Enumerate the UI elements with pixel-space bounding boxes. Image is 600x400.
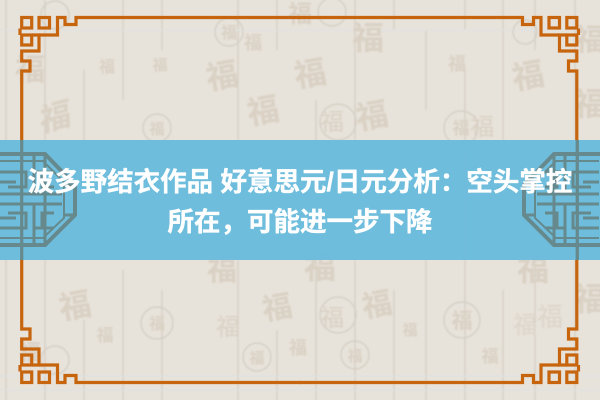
background: paper with faint 福 pattern: 福 xyxy=(448,54,466,74)
background: paper with faint 福 pattern: 福 xyxy=(149,315,165,333)
background: paper with faint 福 pattern: 福 xyxy=(99,58,115,76)
background: paper with faint 福 pattern: 福 xyxy=(207,254,237,287)
background: paper with faint 福 pattern: 福 xyxy=(249,350,265,367)
background: paper with faint 福 pattern: 福 xyxy=(513,312,537,339)
background: paper with faint 福 pattern: 福 xyxy=(221,24,237,42)
background: paper with faint 福 pattern: 福 xyxy=(304,249,336,285)
background: paper with faint 福 pattern: 福 xyxy=(359,287,395,324)
background: paper with faint 福 pattern: 福 xyxy=(452,310,472,333)
background: paper with faint 福 pattern: 福 xyxy=(353,95,391,136)
background: paper with faint 福 pattern: 福 xyxy=(452,119,470,138)
background: paper with faint 福 pattern: 福 xyxy=(320,305,344,332)
background: paper with faint 福 pattern: 福 xyxy=(56,285,94,326)
background: paper with faint 福 pattern: 福 xyxy=(15,54,45,87)
background: paper with faint 福 pattern: 福 xyxy=(216,314,240,341)
background: paper with faint 福 pattern: 福 xyxy=(244,90,282,131)
background: paper with faint 福 pattern: 福 xyxy=(320,109,344,136)
background: paper with faint 福 pattern: 福 xyxy=(482,347,498,366)
background: paper with faint 福 pattern: 福 xyxy=(203,55,241,96)
background: paper with faint 福 pattern: 福 xyxy=(352,20,384,56)
background: paper with faint 福 pattern: 福 xyxy=(39,95,72,140)
background: paper with faint 福 pattern: 福 xyxy=(291,53,329,94)
background: paper with faint 福 pattern: 福 xyxy=(537,302,563,332)
background: paper with faint 福 pattern: 福 xyxy=(288,1,312,28)
background: paper with faint 福 pattern: 福 xyxy=(152,57,168,74)
background: paper with faint 福 pattern: 福 xyxy=(470,114,494,141)
background: paper with faint 福 pattern: 福 xyxy=(517,251,549,287)
background: paper with faint 福 pattern: 福 xyxy=(19,340,41,365)
background: paper with faint 福 pattern: 福 xyxy=(509,55,547,96)
title text: 所在，可能进一步下降 xyxy=(168,207,432,237)
background: paper with faint 福 pattern: 福 xyxy=(244,33,262,53)
background: paper with faint 福 pattern: 福 xyxy=(260,290,295,327)
title text: 波多野结衣作品 好意思元/日元分析：空头掌控 xyxy=(28,167,572,197)
background: paper with faint 福 pattern: 福 xyxy=(96,326,114,345)
background: paper with faint 福 pattern: 福 xyxy=(289,338,307,358)
background: paper with faint 福 pattern: 福 xyxy=(402,322,418,339)
title text xyxy=(28,167,572,237)
background: paper with faint 福 pattern: 福 xyxy=(347,348,363,365)
background: paper with faint 福 pattern: 福 xyxy=(149,121,165,138)
